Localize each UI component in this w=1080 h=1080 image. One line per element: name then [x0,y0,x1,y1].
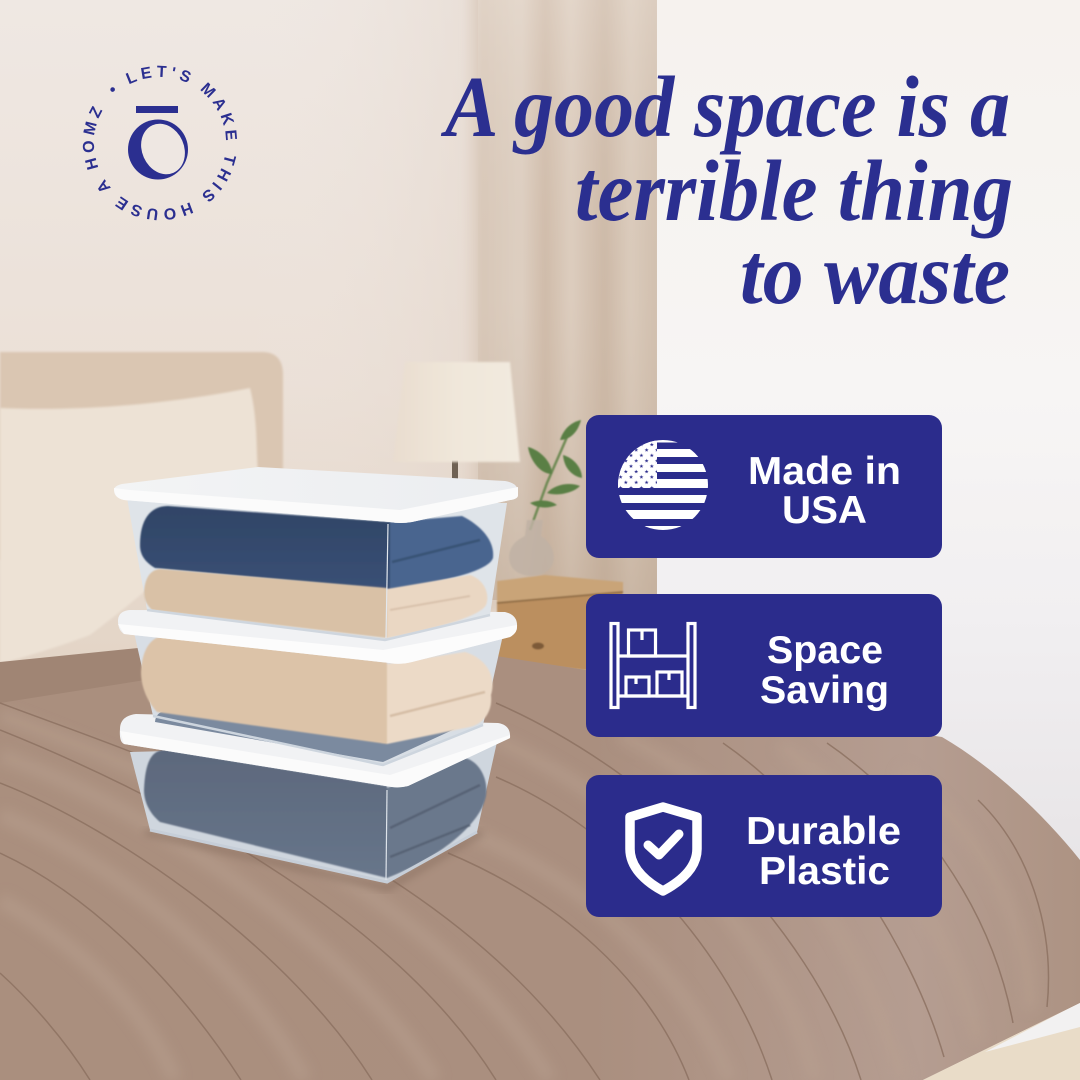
nightstand [497,575,623,672]
bed runner [0,648,150,704]
logo mark [128,106,193,181]
bed quilt [0,656,1080,1080]
middle box [118,610,517,765]
navy blanket [140,506,493,590]
badge: durable plastic [586,775,942,917]
lamp [393,362,520,484]
text: Made in USA [748,450,901,532]
text: Made in USA: USA [782,489,867,532]
bottom lid [120,714,510,787]
bed padding highlights [0,715,1030,1080]
text: Durable Plastic [746,810,901,893]
bed quilting lines [0,703,1048,1080]
text: Made in USA: Made in [748,450,901,493]
vase and plant [509,420,582,576]
storage boxes stack [114,467,518,888]
logo badge [82,66,237,220]
window with sheer curtain [657,0,1080,880]
top beige blanket [144,569,487,638]
text: Space Saving: Saving [760,669,889,712]
middle lid [118,610,517,664]
pillow [0,388,258,664]
top lid [114,467,518,523]
curtain [462,0,660,610]
badge: space saving [586,594,942,737]
badge: made in USA [586,415,942,558]
headline: A good space is a [440,58,1010,155]
wall [0,0,560,700]
text: Space Saving [760,629,889,712]
icon: US flag [618,440,708,530]
bottom box [120,714,510,888]
middle beige blanket [141,636,493,744]
headline: to waste [740,225,1010,322]
headline: terrible thing [575,142,1013,239]
text: Durable Plastic: Durable [746,810,901,853]
bed sheet corner [923,1003,1080,1080]
headline [440,58,1013,322]
logo circular tagline: • LET'S MAKE THIS HOUSE A HOMZ [82,66,237,220]
text: Space Saving: Space [767,629,883,672]
text: Durable Plastic: Plastic [759,850,890,893]
top box [114,467,518,640]
icon: shield with check [630,807,697,891]
slate blanket [155,711,470,762]
bottom blanket [144,750,486,878]
headboard [0,352,283,560]
icon: shelf with boxes [611,624,695,708]
